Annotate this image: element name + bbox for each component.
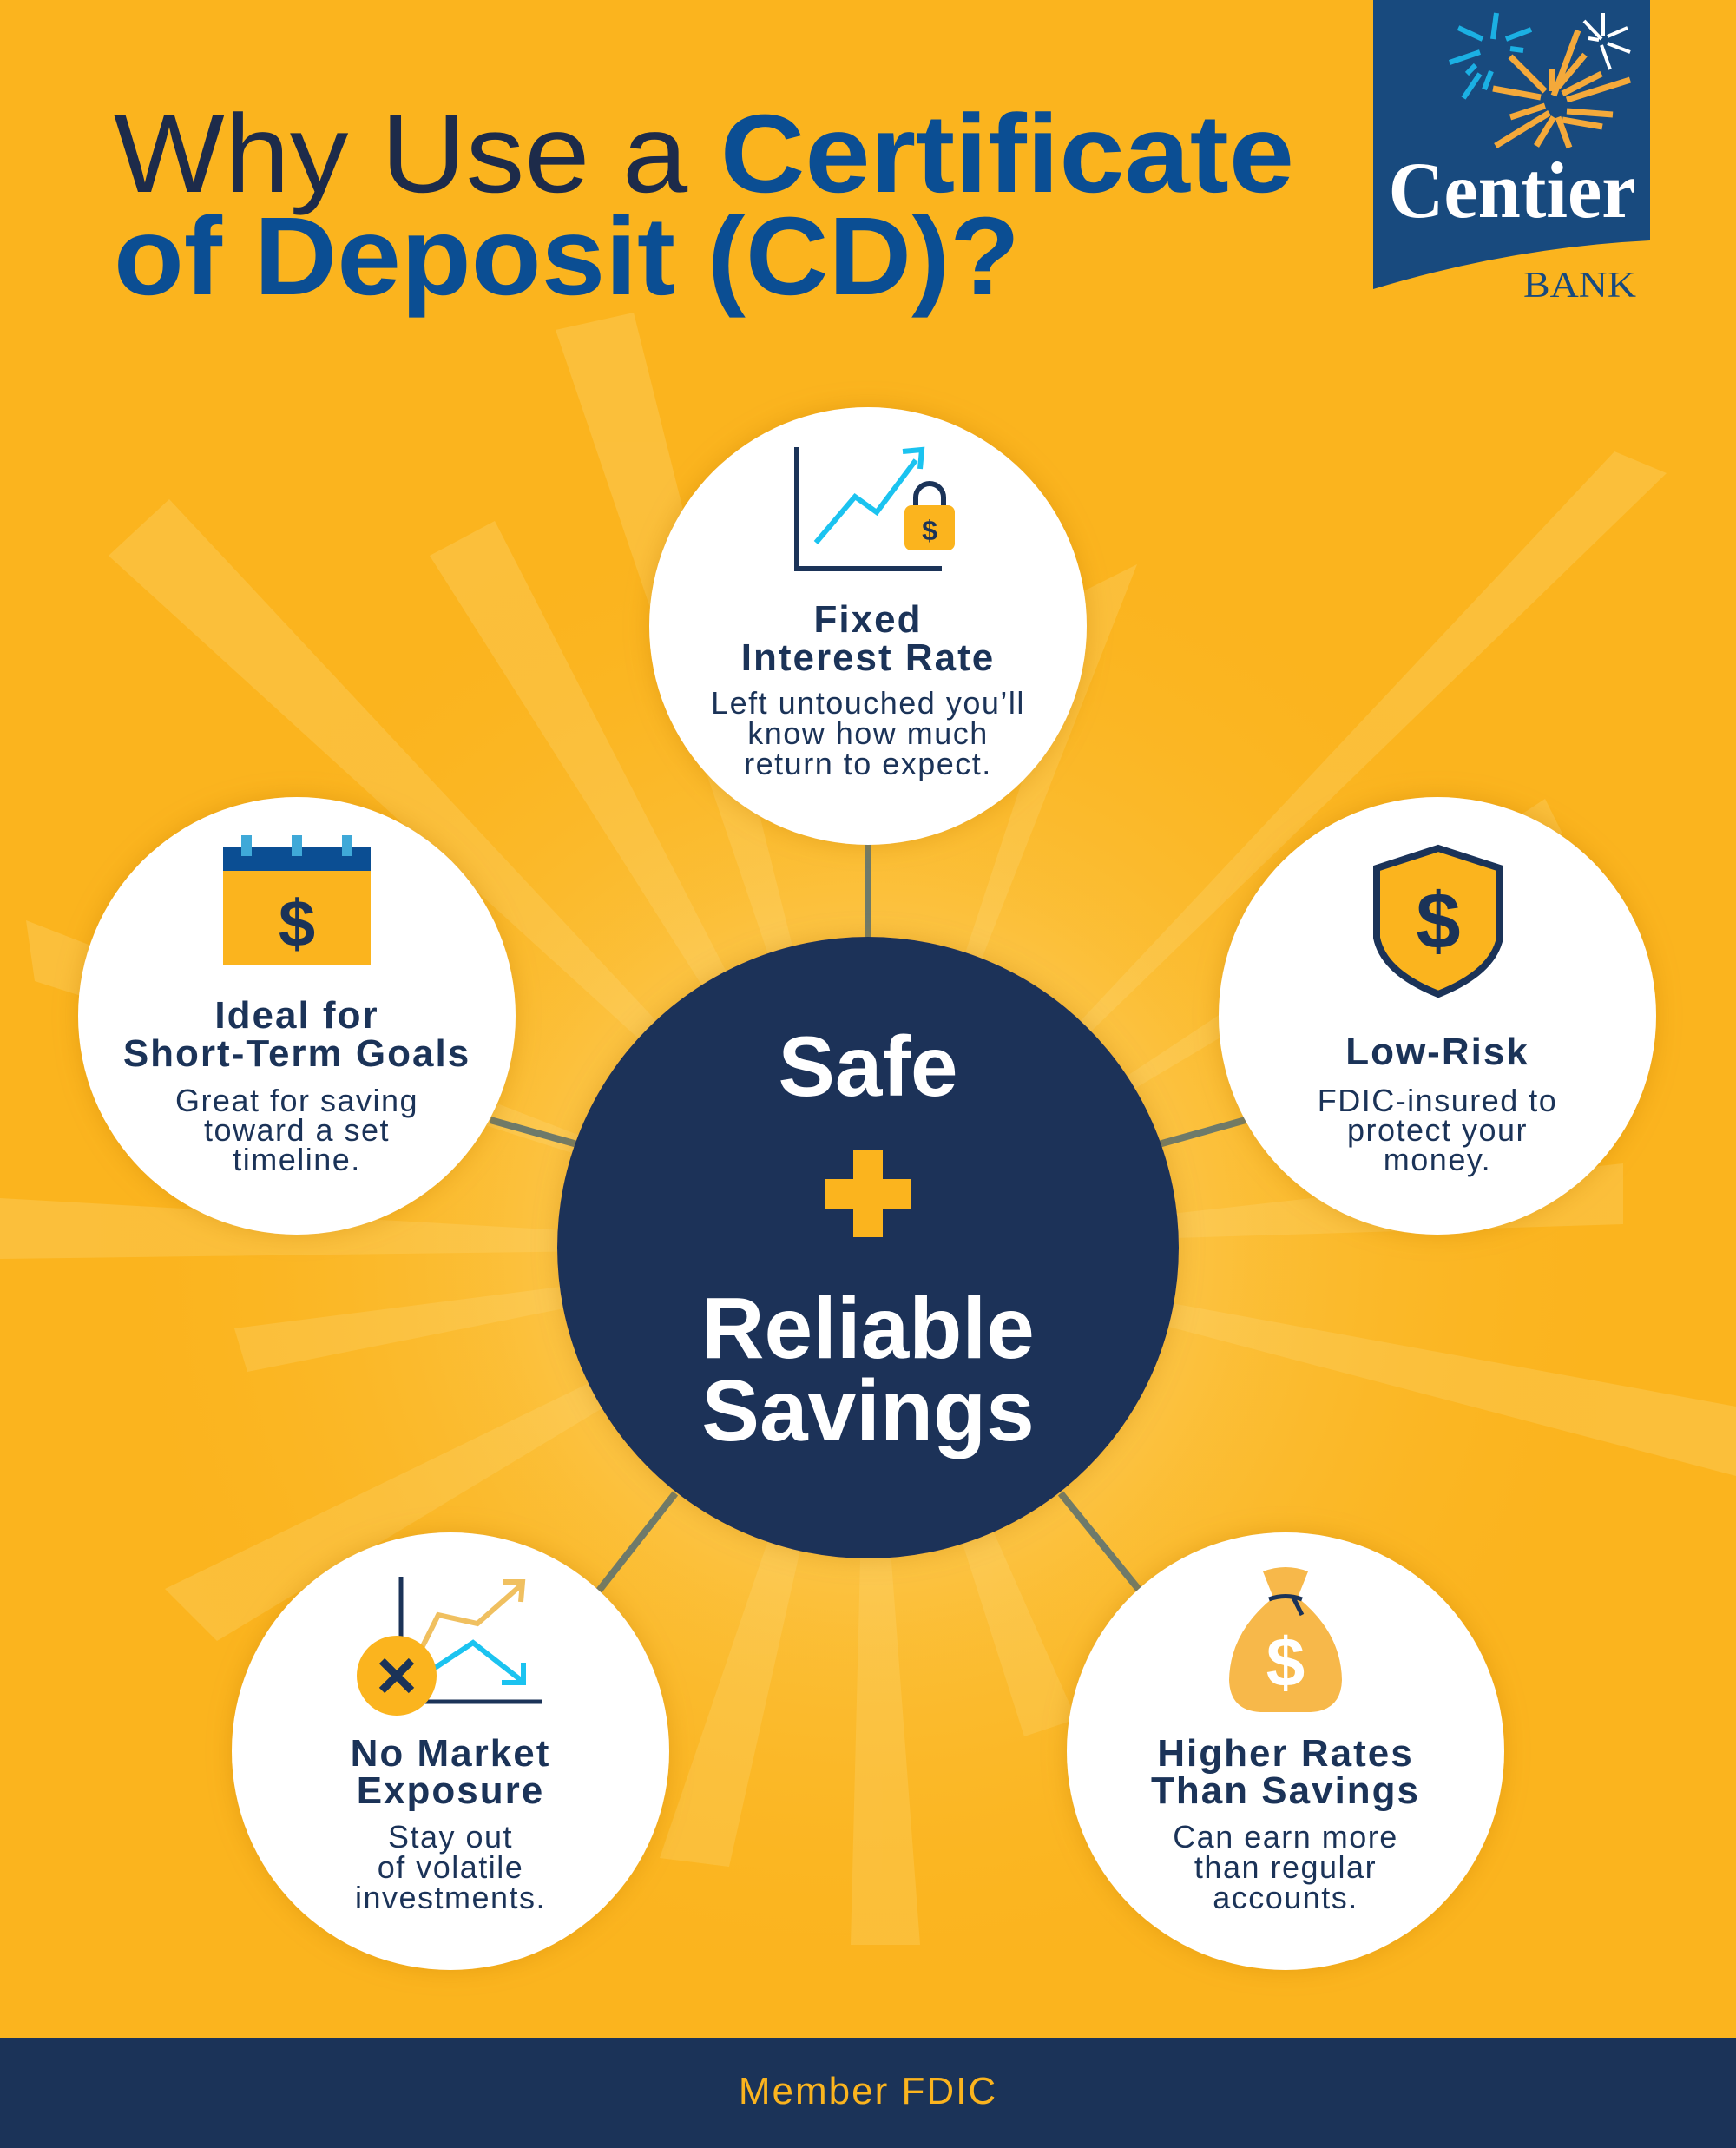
icon: shield: $ [1416, 877, 1461, 965]
center circle: Reliable [701, 1280, 1035, 1377]
panel: higher rates: than regular [1194, 1849, 1377, 1885]
panel: short-term goals: toward a set [204, 1112, 390, 1148]
panel: fixed interest rate [649, 407, 1087, 845]
panel: fixed interest rate: Interest Rate [741, 636, 995, 679]
panel: no market exposure: Stay out [388, 1819, 513, 1855]
title [114, 92, 1294, 319]
icon: money bag: $ [1266, 1624, 1305, 1701]
icon: volatile chart with x [357, 1577, 542, 1716]
panel: low-risk [1219, 797, 1656, 1235]
center circle [557, 937, 1179, 1558]
logo: Centier Bank: BANK [1523, 266, 1636, 306]
icon: fireworks [1450, 13, 1630, 148]
panel: higher rates: accounts. [1213, 1880, 1358, 1915]
panel: no market exposure: Exposure [357, 1769, 544, 1812]
panel: higher rates [1067, 1532, 1504, 1970]
panel: fixed interest rate: return to expect. [744, 746, 992, 781]
panel: short-term goals [78, 797, 516, 1235]
panel: higher rates: Can earn more [1173, 1819, 1398, 1855]
panel: no market exposure: of volatile [378, 1849, 523, 1885]
panel: low-risk: FDIC-insured to [1318, 1083, 1557, 1118]
icon: calendar: $ [279, 887, 315, 961]
panel: low-risk: money. [1384, 1142, 1491, 1177]
panel: short-term goals: Ideal for [214, 994, 379, 1037]
logo: Centier Bank [1373, 0, 1650, 306]
panel: higher rates: Higher Rates [1157, 1732, 1414, 1775]
panel: short-term goals: timeline. [233, 1142, 361, 1177]
footer [0, 2038, 1736, 2148]
icon: calendar [223, 835, 371, 965]
panel: fixed interest rate: Fixed [814, 598, 922, 641]
icon: money bag [1229, 1567, 1342, 1712]
panel: fixed interest rate: Left untouched you’ll [711, 685, 1025, 721]
background rays [0, 313, 1736, 1945]
connectors [490, 842, 1246, 1591]
icon: rising chart with lock: $ [922, 515, 937, 546]
panel: short-term goals: Great for saving [175, 1083, 418, 1118]
footer: Member FDIC [739, 2070, 997, 2112]
icon: shield [1377, 848, 1500, 994]
icon: rising chart with lock [797, 447, 955, 569]
panel: low-risk: Low-Risk [1345, 1031, 1529, 1073]
panel: no market exposure: No Market [351, 1732, 550, 1775]
title: of Deposit (CD)? [114, 194, 1020, 319]
center circle: Savings [701, 1362, 1035, 1459]
panel: low-risk: protect your [1347, 1112, 1528, 1148]
panel: no market exposure: investments. [355, 1880, 546, 1915]
logo: Centier Bank: Centier [1389, 146, 1635, 234]
icon: plus [825, 1150, 911, 1237]
center circle: Safe [778, 1018, 958, 1114]
panel: higher rates: Than Savings [1151, 1769, 1420, 1812]
panel: fixed interest rate: know how much [747, 715, 989, 751]
title: Why Use a Certificate [114, 92, 1294, 216]
panel: short-term goals: Short-Term Goals [123, 1032, 470, 1075]
panel: no market exposure [232, 1532, 669, 1970]
